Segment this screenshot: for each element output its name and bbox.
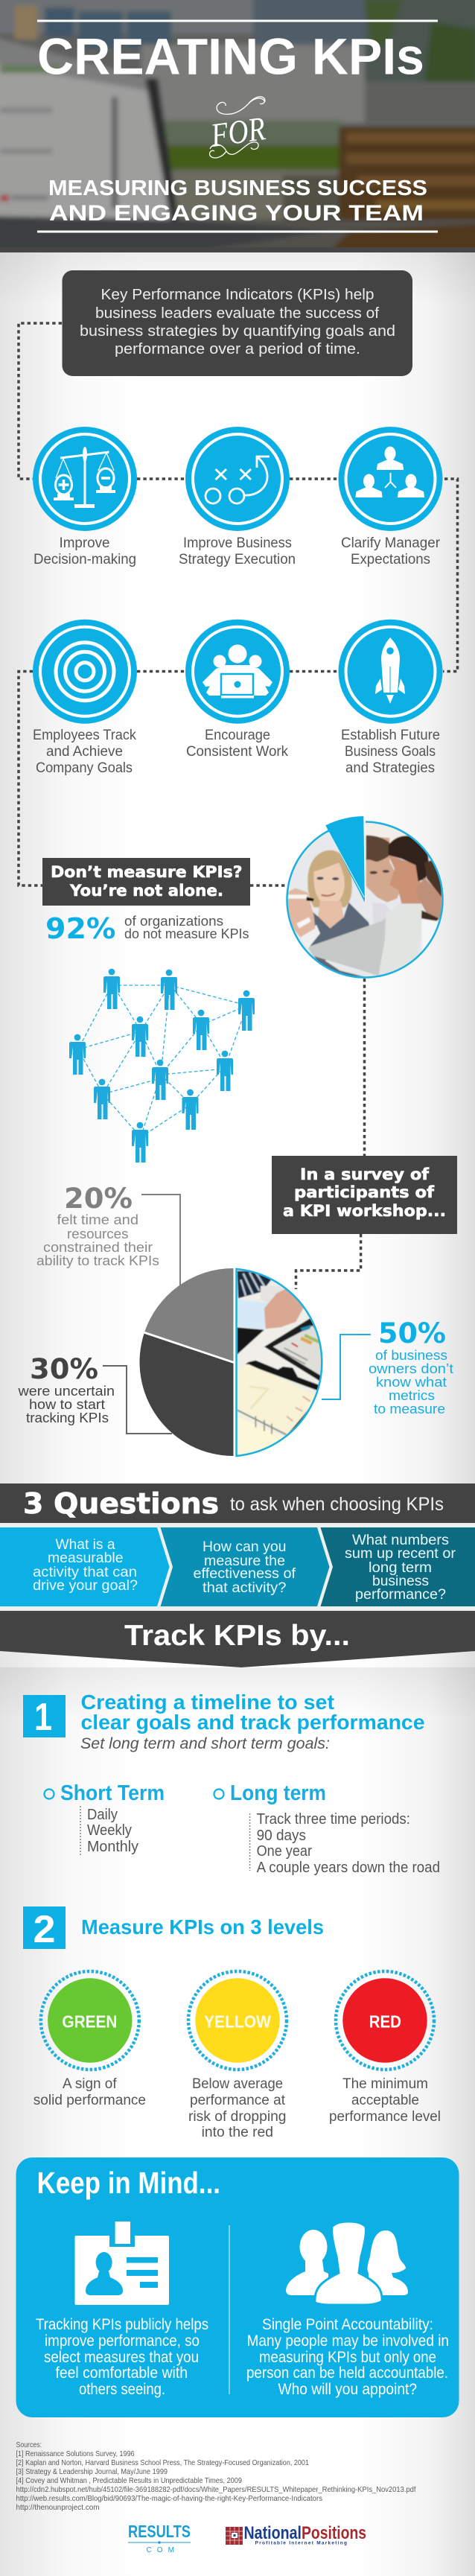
callout: not alone: Don’t measure KPIs? [51,863,243,881]
level: red [329,1971,441,2125]
dotted connector path [19,323,457,1289]
label: Decision-making [34,552,136,567]
sources [16,2440,416,2512]
left note: improve performance, so [45,2332,200,2350]
icon: rocket [338,620,442,724]
stat: 30% [17,1353,172,1434]
question arrow 3: What numbers [352,1532,449,1548]
label [34,535,136,567]
benefit: encourage consistent work [185,620,290,760]
label [179,535,296,567]
level: green [34,1971,146,2108]
question arrow 3: business [372,1573,429,1589]
icon: team around laptop [185,620,290,724]
level: yellow: into the red [202,2125,273,2140]
stat: 92%: of organizations [124,913,223,929]
label: and Strategies [345,760,435,776]
subtitle: AND ENGAGING YOUR TEAM [49,201,424,226]
sources: [3] Strategy & Leadership Journal, May/June 1999 [16,2467,168,2476]
logo: national positions: National [244,2523,302,2543]
label: Establish Future [341,728,440,743]
label: Company Goals [36,760,133,776]
label: Improve [60,535,110,551]
left note: Tracking KPIs publicly helps [36,2316,208,2333]
level: red: performance level [329,2109,441,2125]
business team photo [287,822,442,977]
subtitle [48,176,427,226]
long term list: A couple years down the road [257,1860,440,1876]
stat: 30%: were uncertain [17,1383,115,1399]
label [341,728,440,776]
stat: 92% [45,912,249,945]
banner: 3 questions: to ask when choosing KPIs [230,1494,444,1515]
label [33,728,136,776]
benefit: employees track goals [33,620,137,776]
number badge 1 [23,1695,66,1739]
banner: track KPIs by: Track KPIs by... [124,1620,350,1652]
ornament: FOR [208,97,267,158]
dark band [0,247,475,252]
sources: [4] Covey and Whitman , Predictable Results in Unpredictable Times, 2009 [16,2476,242,2485]
banner: 3 questions: 3 Questions [23,1487,219,1520]
question arrow 2: measure the [204,1553,285,1569]
hero background photo [0,0,475,253]
callout: workshop survey: participants of [294,1183,435,1201]
callout: not alone [42,858,250,906]
benefit: improve decision-making [33,427,137,567]
stat: 92%: do not measure KPIs [124,926,249,941]
panel: keep in mind [16,2157,459,2417]
ornament: FOR: FOR [208,109,267,154]
right note: measuring KPIs but only one [259,2349,436,2366]
intro text box: business leaders evaluate the success of [95,305,379,322]
label: and Achieve [46,744,123,760]
pie photo: 8% wedge [283,815,447,981]
level: green: GREEN [62,2012,117,2032]
benefit: improve strategy execution [179,427,296,567]
stat: 30%: 30% [30,1353,98,1385]
question arrow 2 [161,1527,329,1606]
left note: select measures that you [44,2349,199,2366]
long term list [214,1781,440,1876]
left note: others seeing. [79,2381,165,2398]
number badge 2: 2 [33,1908,55,1951]
stat: 50%: of business [375,1347,447,1363]
label [186,728,288,760]
right note: Who will you appoint? [278,2381,417,2398]
short term list [45,1781,165,1856]
blue slice [325,816,365,903]
long term list: One year [257,1843,312,1860]
level: yellow: performance at [190,2093,286,2108]
level: red: RED [369,2012,401,2032]
stat: 20%: felt time and [57,1212,138,1227]
icon: balance scale [33,427,137,531]
divider strip [0,1523,475,1611]
right note: person can be held accountable. [246,2364,448,2382]
question arrow 1: What is a [55,1536,115,1553]
question arrow 2: How can you [203,1539,286,1555]
long term list: 90 days [257,1828,306,1844]
short term list: Short Term [60,1781,165,1805]
right note: Single Point Accountability: [262,2316,433,2333]
sources: [2] Kaplan and Norton, Harvard Business School Press, The Strategy-Focused Organization, 2001 [16,2458,309,2467]
icon: target [33,620,137,724]
icon: play diagram [185,427,290,531]
hero header [0,0,475,253]
banner: track KPIs by [0,1611,475,1667]
stat: 20%: ability to track KPIs [36,1253,159,1268]
level: green: A sign of [63,2076,117,2092]
stat: 50%: to measure [374,1401,445,1416]
level: yellow [188,1971,287,2140]
callout: workshop survey [272,1156,457,1234]
level: green: solid performance [34,2093,146,2108]
step 1 [23,1691,424,1752]
intro text box: performance over a period of time. [115,340,360,357]
slice gap [363,815,366,903]
stat: 20%: 20% [64,1183,133,1215]
step heading [80,1691,424,1734]
30% slice [140,1333,234,1456]
logo: national positions [226,2523,366,2546]
question arrow 1: drive your goal? [33,1577,138,1594]
stat: 92%: 92% [45,912,116,945]
level: yellow: risk of dropping [188,2109,286,2125]
intro text box: business strategies by quantifying goals and [80,322,395,340]
icon: three people silhouettes [286,2222,408,2305]
callout: workshop survey: a KPI workshop... [283,1202,446,1220]
label: Consistent Work [186,744,288,760]
stat: 50%: 50% [378,1317,446,1349]
short term list: Weekly [87,1822,132,1839]
logo: results.com: RESULTS [128,2522,191,2541]
intro text box: Key Performance Indicators (KPIs) help [101,286,374,303]
level: yellow: Below average [192,2076,283,2092]
benefit: clarify manager expectations [338,427,442,567]
level: yellow: YELLOW [204,2012,271,2032]
20% slice [144,1268,234,1362]
question arrow 3: sum up recent or [345,1545,456,1562]
step 2 [23,1906,324,1951]
step heading: clear goals and track performance [80,1711,424,1734]
label: Improve Business [183,535,292,551]
label [341,535,441,567]
label: Business Goals [345,744,436,760]
logo: results.com: COM [146,2546,174,2554]
50% photo slice [237,1270,321,1455]
stat: 20% [36,1183,180,1285]
short term list: Monthly [87,1839,138,1855]
step subtitle: Set long term and short term goals: [80,1735,330,1752]
logo: national positions: Positions [302,2523,366,2543]
icon: ID badge [74,2222,169,2305]
stat: 20%: constrained their [43,1239,153,1255]
label: Employees Track [33,728,136,743]
sources: Sources: [16,2440,42,2449]
benefit: establish future goals [338,620,442,776]
callout: workshop survey: In a survey of [300,1165,430,1183]
level: red: The minimum [342,2076,428,2092]
network of people [69,969,255,1163]
question arrow 1: measurable [48,1550,124,1566]
step heading: Creating a timeline to set [80,1691,334,1714]
bottom rule [37,231,438,232]
stat: 20%: resources [67,1226,128,1241]
banner: 3 questions [0,1483,475,1523]
long term list: Track three time periods: [257,1811,410,1828]
logo: results.com [128,2522,191,2554]
logo: national positions: Profitable Internet Marketing [255,2541,347,2546]
stat: 50%: owners don’t [369,1361,453,1376]
left note [36,2316,208,2398]
stat: 30%: tracking KPIs [26,1410,109,1425]
question arrow 1 [0,1527,170,1606]
short term list: Daily [87,1807,118,1823]
step heading: Measure KPIs on 3 levels [81,1915,324,1939]
stat: 30%: how to start [29,1396,105,1412]
label: Expectations [351,552,430,567]
question arrow 3 [320,1527,475,1606]
subtitle: MEASURING BUSINESS SUCCESS [48,176,427,200]
right note: Many people may be involved in [247,2332,449,2350]
stat: 50%: know what [376,1374,447,1390]
label: Strategy Execution [179,552,296,567]
sources: http://cdn2.hubspot.net/hub/45102/file-369188282-pdf/docs/White_Papers/RESULTS_Whitepaper_Rethinking-KPIs_Nov2013.pdf [16,2485,416,2494]
panel heading: Keep in Mind... [37,2166,220,2200]
label: Clarify Manager [341,535,441,551]
long term list: Long term [230,1781,326,1805]
question arrow 3: performance? [355,1586,446,1603]
callout: not alone: You’re not alone. [69,882,223,900]
sources: http://thenounproject.com [16,2503,100,2512]
question arrow 1: activity that can [33,1564,137,1580]
pie chart [140,1268,333,1458]
icon: team hierarchy [338,427,442,531]
level: red: acceptable [351,2093,419,2108]
number badge 2 [23,1906,66,1951]
label: Encourage [205,728,270,743]
question arrow 2: that activity? [203,1580,287,1596]
title: CREATING KPIs [37,28,424,85]
sources: http://web.results.com/Blog/bid/90693/The-magic-of-having-the-right-Key-Performance-Indicators [16,2494,322,2503]
stat: 50% [322,1317,453,1416]
sources: [1] Renaissance Solutions Survey, 1996 [16,2449,135,2458]
question arrow 2: effectiveness of [194,1565,296,1582]
left note: feel comfortable with [55,2364,188,2382]
stat: 50%: metrics [389,1387,435,1403]
right note [246,2316,449,2398]
number badge 1: 1 [34,1696,52,1739]
top rule [37,19,438,22]
question arrow 3: long term [369,1559,432,1576]
intro text box [63,270,412,376]
